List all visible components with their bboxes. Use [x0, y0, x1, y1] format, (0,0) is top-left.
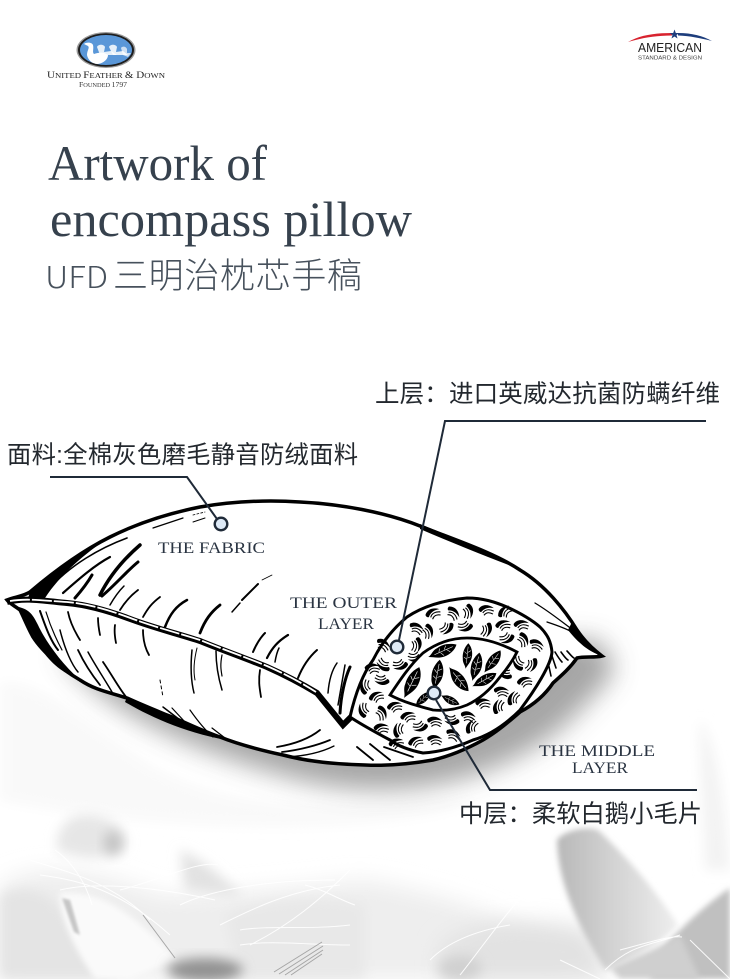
title: Artwork of — [48, 135, 267, 191]
soft back shapes — [180, 850, 243, 897]
callout: fabric — [7, 442, 358, 530]
pillow part labels: LAYER — [572, 760, 629, 777]
callout: fabric: 面料:全棉灰色磨毛静音防绒面料 — [7, 442, 358, 469]
callout: outer layer — [375, 380, 720, 653]
dark smudge — [167, 958, 243, 979]
callout: middle layer — [428, 687, 702, 828]
pillow part labels: THE FABRIC — [158, 540, 265, 557]
upper left smudge — [57, 815, 127, 858]
pillow part labels: LAYER — [318, 616, 375, 633]
feather photo background — [0, 680, 730, 979]
large right feather — [557, 828, 678, 970]
outer feather layer leaf — [350, 598, 552, 753]
title: encompass pillow — [50, 191, 412, 247]
white feather strands — [30, 850, 730, 979]
bright feather wedge — [60, 893, 177, 979]
logo: American Standard & Design — [628, 30, 712, 62]
pillow fold lines — [40, 512, 574, 760]
pillow outline thick accents — [19, 524, 602, 741]
callout: outer layer: 上层：进口英威达抗菌防螨纤维 — [375, 380, 720, 408]
soft wave under pillow — [0, 683, 480, 826]
pillow seam — [7, 600, 362, 725]
logo: United Feather & Down — [47, 32, 166, 89]
pillow part labels: THE OUTER — [290, 595, 398, 612]
subtitle: 三明治枕芯手稿 — [113, 248, 362, 299]
inner feather layer leaf — [390, 638, 517, 710]
logo: United Feather & Down: FOUNDED 1797 — [79, 81, 128, 89]
subtitle: UFD — [45, 253, 108, 297]
title — [48, 135, 412, 247]
callout: middle layer: 中层：柔软白鹅小毛片 — [459, 801, 702, 828]
pillow body — [7, 501, 602, 765]
lower left feather mass — [0, 871, 600, 979]
grey feather barbs — [143, 915, 323, 975]
bottom centre plume — [440, 922, 610, 979]
logo: American Standard & Design: STANDARD & DESIGN — [638, 56, 702, 62]
pillow part labels: THE MIDDLE — [539, 743, 655, 760]
logo: United Feather & Down: UNITED FEATHER & D OWN — [47, 71, 166, 81]
logo: American Standard & Design: AMERICAN — [638, 41, 702, 55]
right corner feather — [650, 888, 730, 979]
pillow shadow — [60, 640, 615, 790]
pillow part labels — [158, 540, 655, 777]
pillow illustration — [7, 501, 602, 765]
